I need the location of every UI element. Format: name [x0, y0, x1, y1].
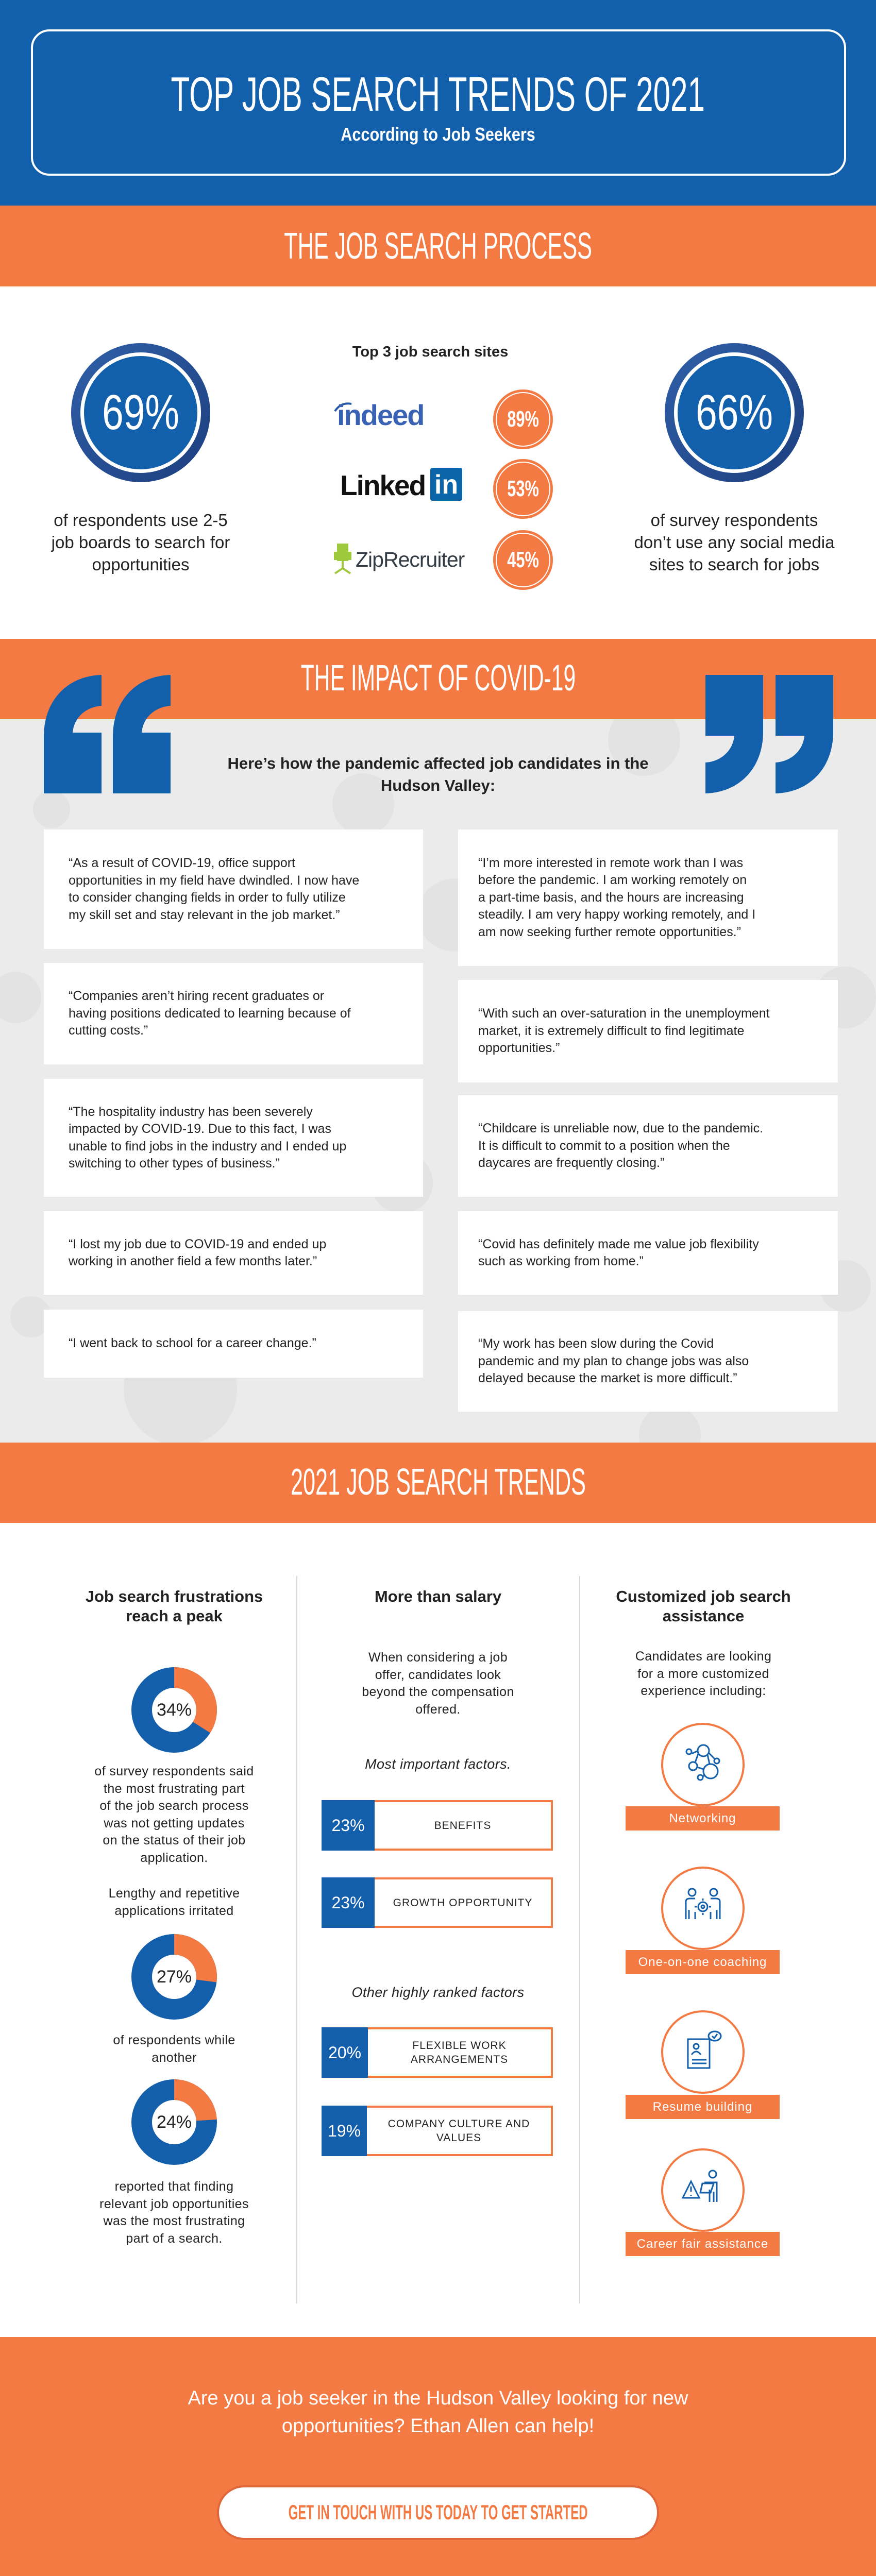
bar: culture: VALUES [436, 2132, 481, 2144]
card: quote 3: switching to other types of business.” [69, 1156, 280, 1171]
logo: linkedin: in [434, 470, 458, 500]
text: 69% description [50, 511, 230, 574]
card: quote 2: “Companies aren’t hiring recent graduates or [69, 989, 324, 1003]
text: 66% description [634, 511, 835, 574]
card: quote 9 [458, 1211, 838, 1295]
card: quote 4: “I lost my job due to COVID-19 and ended up [69, 1236, 326, 1251]
text: 34% description: was not getting updates [104, 1816, 245, 1830]
card: quote 10 [458, 1311, 838, 1412]
card: quote 4 [44, 1211, 423, 1295]
card: quote 5 [44, 1310, 423, 1378]
heading: top 3 sites: Top 3 job search sites [352, 344, 508, 360]
card: quote 1: to consider changing fields in order to fully utilize [69, 890, 346, 905]
card: quote 10: “My work has been slow during the Covid [478, 1336, 714, 1351]
card: quote 2: cutting costs.” [69, 1023, 148, 1038]
donut: 34% [131, 1667, 217, 1753]
badge: 53% [493, 459, 553, 519]
donut: 27% [131, 1934, 217, 2020]
card: quote 10: delayed because the market is more difficult.” [478, 1371, 737, 1385]
bar: flexible: ARRANGEMENTS [411, 2054, 508, 2065]
bar: flexible: FLEXIBLE WORK [412, 2040, 507, 2052]
icon: coaching [661, 1867, 745, 1950]
icon: networking [661, 1723, 745, 1806]
card: quote 2: having positions dedicated to learning because of [69, 1006, 351, 1021]
text: 66% description: sites to search for jobs [649, 555, 819, 574]
text: intro [362, 1650, 514, 1717]
subheading: covid intro [227, 754, 649, 794]
text: 27% description: of respondents while [113, 2033, 235, 2047]
text: 24% description: reported that finding [115, 2179, 233, 2194]
badge: 45% [493, 530, 553, 590]
stat: 66%: 66% [696, 385, 773, 440]
card: quote 9: such as working from home.” [478, 1254, 644, 1268]
card: quote 7: “With such an over-saturation in the unemployment [478, 1006, 770, 1021]
bar: culture [322, 2106, 553, 2156]
card: quote 3: impacted by COVID-19. Due to this fact, I was [69, 1122, 331, 1136]
header band [0, 0, 876, 206]
icon: open quote [44, 675, 171, 793]
stat: 69% [71, 343, 210, 482]
heading: frustrations: reach a peak [126, 1607, 223, 1625]
column: customized assistance [616, 1587, 791, 1625]
heading: the job search process: THE JOB SEARCH PROCESS [284, 226, 592, 267]
bar: growth: GROWTH OPPORTUNITY [393, 1897, 532, 1908]
heading: customized: assistance [663, 1607, 744, 1625]
label: career fair [626, 2232, 780, 2256]
card: quote 1: opportunities in my field have dwindled. I now have [69, 873, 359, 887]
text: 66% description: don’t use any social media [634, 533, 834, 552]
bar: benefits [322, 1800, 553, 1851]
logo: linkedin [340, 468, 462, 501]
card: quote 8: “Childcare is unreliable now, due to the pandemic. [478, 1121, 763, 1136]
text: 69% description: of respondents use 2-5 [54, 511, 228, 530]
text: lengthy: Lengthy and repetitive [109, 1886, 240, 1901]
text: intro: offer, candidates look [375, 1667, 501, 1682]
bar: culture: 19% [328, 2122, 361, 2140]
text: 24% description: was the most frustrating [103, 2214, 245, 2228]
heading: more than salary: More than salary [375, 1587, 501, 1605]
text: other factors: Other highly ranked factors [352, 1985, 524, 2000]
text: most important: Most important factors. [365, 1756, 511, 1772]
text: candidates looking [635, 1649, 771, 1698]
card: quote 6: “I’m more interested in remote work than I was [478, 856, 743, 870]
heading: frustrations: Job search frustrations [86, 1587, 263, 1605]
section band: covid [0, 639, 876, 719]
card: quote 8: daycares are frequently closing.” [478, 1156, 664, 1170]
bar: culture: COMPANY CULTURE AND [388, 2118, 530, 2130]
title box [31, 29, 846, 176]
text: 27% description: another [151, 2050, 197, 2065]
text: intro: offered. [415, 1702, 461, 1717]
card: quote 3 [44, 1079, 423, 1197]
text: 69% description: job boards to search for [52, 533, 230, 552]
bar: flexible [322, 2027, 553, 2078]
card: quote 6 [458, 829, 838, 966]
donut: 34%: 34% [157, 1700, 192, 1720]
heading: frustrations [86, 1587, 263, 1625]
text: lengthy: applications irritated [114, 1903, 234, 1918]
bar: benefits: 23% [331, 1816, 365, 1834]
column: more than salary [352, 1587, 524, 2000]
bar: growth [322, 1877, 553, 1928]
text: intro: When considering a job [368, 1650, 508, 1665]
donut: 24%: 24% [157, 2112, 192, 2132]
label: resume: Resume building [653, 2100, 752, 2113]
text: 34% description [94, 1764, 254, 1865]
logo: ziprecruiter [334, 544, 465, 574]
label: resume [626, 2095, 780, 2119]
heading: 2021 job search trends: 2021 JOB SEARCH TRENDS [290, 1462, 585, 1503]
heading: impact of covid: THE IMPACT OF COVID-19 [300, 658, 576, 699]
card: quote 6: am now seeking further remote opportunities.” [478, 925, 741, 939]
card: quote 6: before the pandemic. I am working remotely on [478, 873, 747, 887]
card: quote 3: “The hospitality industry has been severely [69, 1105, 313, 1119]
label: coaching [626, 1950, 780, 1974]
button: get in touch: GET IN TOUCH WITH US TODAY TO GET STARTED [289, 2501, 587, 2523]
card: quote 7 [458, 980, 838, 1082]
card: quote 8: It is difficult to commit to a position when the [478, 1139, 730, 1153]
text: 34% description: of survey respondents said [94, 1764, 254, 1778]
card: quote 7: market, it is extremely difficult to find legitimate [478, 1024, 744, 1038]
card: quote 5: “I went back to school for a career change.” [69, 1336, 316, 1350]
section band: trends [0, 1443, 876, 1523]
subheading: covid intro: Here’s how the pandemic affected job candidates in the [227, 754, 649, 772]
badge: 53%: 53% [507, 476, 539, 501]
donut: 24% [131, 2079, 217, 2165]
footer text: call to action: Are you a job seeker in the Hudson Valley looking for new [188, 2387, 688, 2409]
logo: indeed: indeed [337, 399, 424, 431]
column: frustrations [86, 1587, 263, 2245]
text: 27% description [113, 2033, 235, 2065]
text: 66% description: of survey respondents [651, 511, 818, 530]
badge: 89% [493, 389, 553, 449]
card: quote 6: steadily. I am very happy working remotely, and I [478, 907, 755, 922]
text: 34% description: on the status of their job [103, 1833, 246, 1848]
card: quote 8 [458, 1095, 838, 1197]
text: 24% description: relevant job opportunities [99, 2197, 249, 2211]
text: 34% description: the most frustrating part [104, 1782, 245, 1796]
card: quote 4: working in another field a few months later.” [69, 1254, 317, 1268]
section band: job search process [0, 206, 876, 286]
title: TOP JOB SEARCH TRENDS OF 2021 [171, 67, 705, 121]
stat: 69%: 69% [102, 385, 179, 440]
footer text: call to action: opportunities? Ethan Allen can help! [282, 2415, 594, 2437]
text: 34% description: of the job search process [99, 1799, 249, 1813]
icon: close quote [705, 675, 833, 793]
card: quote 1 [44, 829, 423, 949]
card: quote 6: a part-time basis, and the hours are increasing [478, 890, 744, 905]
heading: customized [616, 1587, 791, 1625]
logo: ziprecruiter: ZipRecruiter [356, 548, 464, 571]
text: 24% description [99, 2179, 249, 2245]
icon: resume [661, 2010, 745, 2094]
text: 34% description: application. [140, 1851, 208, 1865]
footer text: call to action [188, 2387, 688, 2437]
badge: 45%: 45% [507, 547, 539, 572]
card: quote 1: “As a result of COVID-19, office support [69, 856, 295, 870]
label: coaching: One-on-one coaching [638, 1955, 767, 1969]
card: quote 9: “Covid has definitely made me value job flexibility [478, 1236, 759, 1251]
footer band [0, 2337, 876, 2576]
label: career fair: Career fair assistance [637, 2237, 768, 2250]
bar: growth: 23% [331, 1893, 365, 1911]
logo: linkedin: Linked [340, 469, 425, 501]
card: quote 10: pandemic and my plan to change jobs was also [478, 1354, 749, 1368]
card: quote 3: unable to find jobs in the industry and I ended up [69, 1139, 346, 1153]
text: candidates looking: Candidates are looking [635, 1649, 771, 1664]
bar: benefits: BENEFITS [434, 1820, 491, 1831]
text: candidates looking: for a more customized [637, 1666, 769, 1681]
icon: career fair [661, 2148, 745, 2232]
card: quote 7: opportunities.” [478, 1041, 560, 1055]
card: quote 2 [44, 963, 423, 1064]
panel background: covid [0, 719, 876, 1443]
text: 69% description: opportunities [92, 555, 189, 574]
subheading: covid intro: Hudson Valley: [381, 776, 495, 794]
label: networking: Networking [669, 1811, 736, 1825]
text: intro: beyond the compensation [362, 1685, 514, 1699]
label: networking [626, 1806, 780, 1831]
heading: customized: Customized job search [616, 1587, 791, 1605]
stat: 66% [665, 343, 804, 482]
badge: 89%: 89% [507, 406, 539, 432]
text: candidates looking: experience including: [641, 1684, 766, 1698]
text: lengthy [109, 1886, 240, 1918]
subtitle: According to Job Seekers [341, 124, 535, 145]
bar: flexible: 20% [328, 2043, 361, 2062]
card: quote 1: my skill set and stay relevant in the job market.” [69, 908, 340, 922]
text: 24% description: part of a search. [126, 2231, 223, 2245]
button: get in touch [217, 2485, 659, 2540]
donut: 27%: 27% [157, 1967, 192, 1987]
